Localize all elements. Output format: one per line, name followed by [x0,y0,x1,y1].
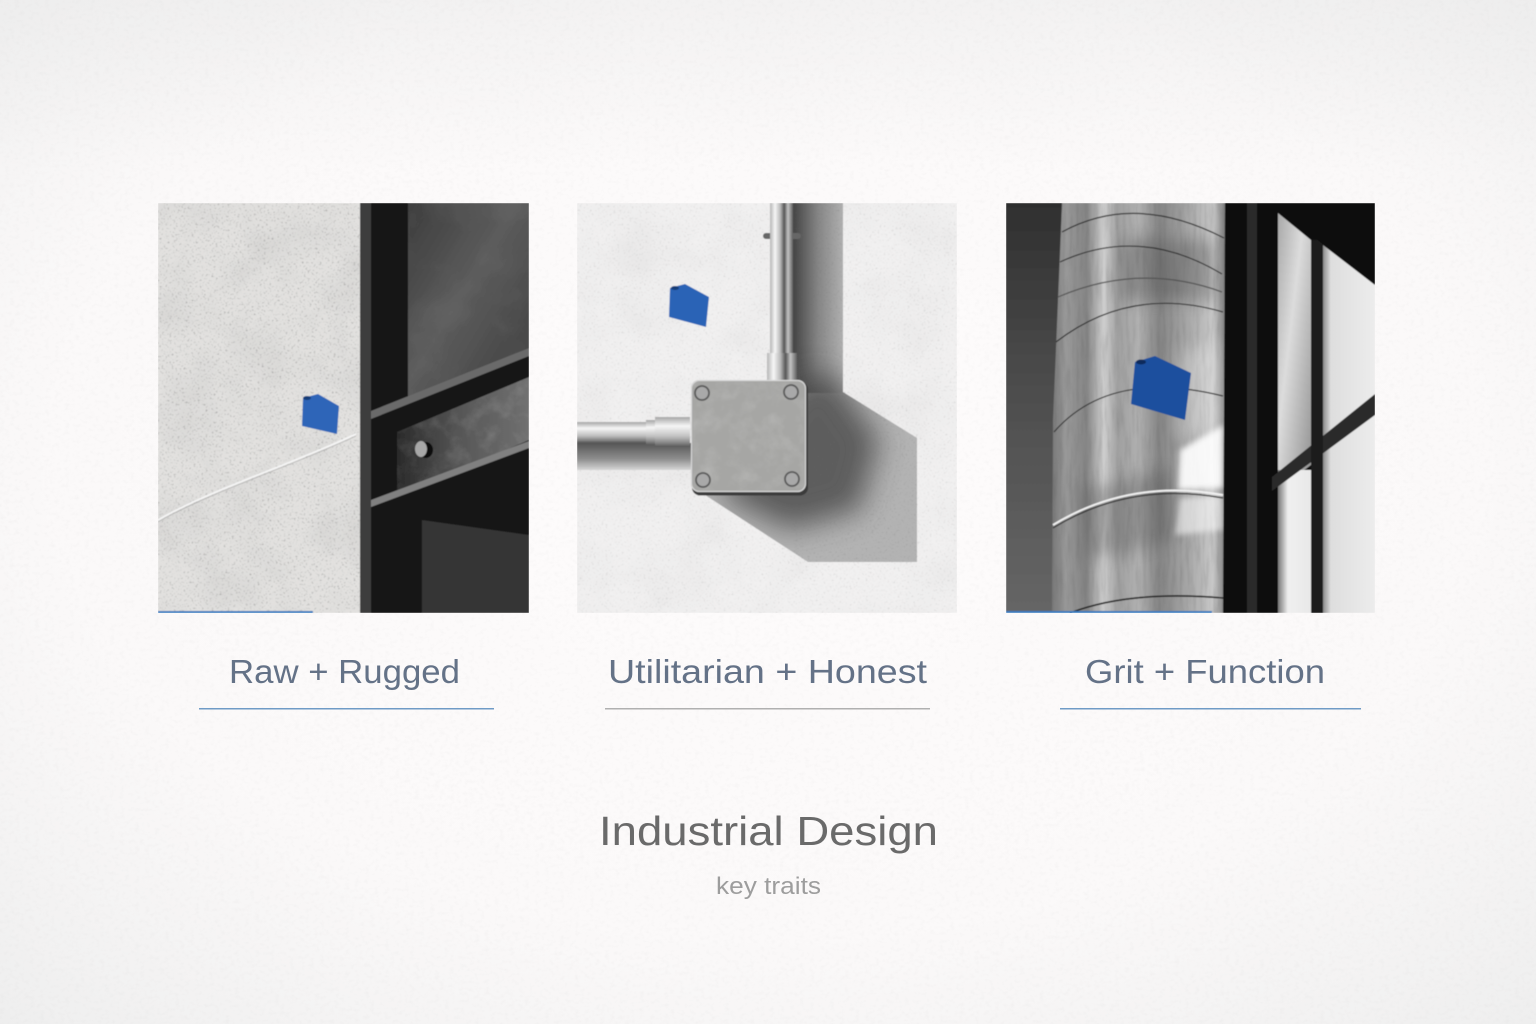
caption: raw + rugged: Raw + Rugged [229,653,460,690]
title: Industrial Design [599,808,938,854]
horizontal conduit [577,417,690,447]
tape curl [671,286,679,290]
tape curl [303,396,311,400]
spiral metal duct [1050,203,1226,613]
icon: blue tape [302,394,339,434]
concrete wall [158,203,362,613]
blue accent bar [158,611,313,613]
subtitle: key traits [716,873,821,900]
icon: blue tape [1131,356,1191,420]
cast shadows [577,203,923,563]
caption: grit + function: Grit + Function [1085,653,1325,690]
panel: raw + rugged photo [158,203,529,613]
plaster wall [577,203,957,613]
panel: grit + function photo [1006,203,1375,613]
tape curl [1136,360,1146,364]
panel: utilitarian + honest photo [577,203,957,613]
caption: utilitarian + honest: Utilitarian + Honest [608,653,927,690]
junction box [691,380,808,496]
steel i-beam structure [360,203,529,613]
vertical conduit [763,203,801,380]
dark window corner [1318,240,1374,284]
icon: blue tape [669,284,709,327]
dark side wall [1006,203,1066,613]
blue accent bar [1006,611,1212,613]
window frame and panes [1222,203,1375,613]
